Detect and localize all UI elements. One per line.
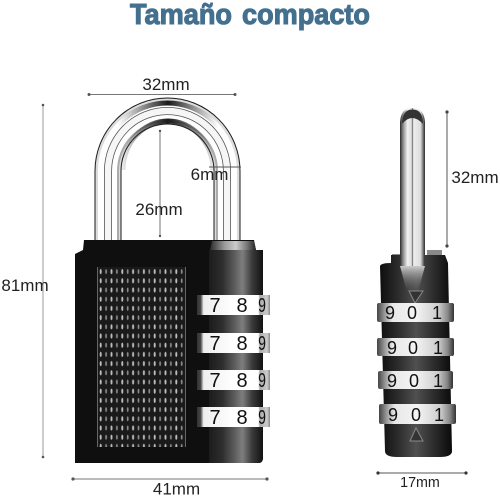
dimension: 32mm width <box>88 75 236 96</box>
lock body <box>75 240 263 463</box>
combination wheel 3 <box>197 368 270 392</box>
side shackle reflection <box>400 266 425 292</box>
side wheel 4: 0 <box>411 405 421 425</box>
dimension: 32mm side height: 32mm <box>451 168 499 187</box>
side wheel 1 <box>377 303 454 323</box>
combination wheel 2: 8 <box>236 333 248 355</box>
side body <box>380 255 452 457</box>
shackle collar <box>210 241 256 250</box>
dimension: 26mm inner height <box>135 130 183 237</box>
combination wheel 4: 8 <box>236 407 248 429</box>
combination wheel 3: 8 <box>236 370 248 392</box>
combination wheel 2: 7 <box>209 333 221 355</box>
side shackle <box>400 108 425 266</box>
side wheel 3: 1 <box>433 371 443 391</box>
side wheel 2: 1 <box>433 338 443 358</box>
textured panel <box>97 267 186 447</box>
side wheel 4: 9 <box>388 405 398 425</box>
side wheel 4 <box>379 404 456 425</box>
front padlock <box>75 103 270 463</box>
side wheel 2 <box>377 338 454 358</box>
combination wheel 4: 9 <box>258 405 266 429</box>
side centre arrow top <box>409 291 423 303</box>
side padlock <box>377 108 456 457</box>
dimension: 6mm shackle: 6mm <box>191 165 228 184</box>
side wheel 1: 0 <box>407 303 417 323</box>
dimension: 32mm width: 32mm <box>142 75 190 94</box>
shackle <box>101 103 234 244</box>
combination wheel 3: 7 <box>209 370 221 392</box>
side wheel 3: 9 <box>387 371 397 391</box>
side collar nubs <box>392 250 442 266</box>
dimension: 17mm depth <box>376 471 468 491</box>
title <box>130 0 370 31</box>
combination wheel 2 <box>197 331 270 355</box>
combination wheel 4: 7 <box>209 407 221 429</box>
dimension: 32mm side height <box>445 110 499 248</box>
dimension: 41mm width <box>71 477 269 497</box>
side wheel 3 <box>378 371 453 391</box>
side wheel 1: 9 <box>385 303 395 323</box>
combination wheel 1: 9 <box>258 293 266 317</box>
dimension: 26mm inner height: 26mm <box>135 200 183 219</box>
side shackle cap <box>402 110 423 124</box>
dimension: 17mm depth: 17mm <box>400 475 440 491</box>
cylinder <box>209 250 263 463</box>
combination wheel 3: 9 <box>258 368 266 392</box>
combination wheel 1 <box>197 293 270 317</box>
side wheel 3: 0 <box>409 371 419 391</box>
dimension: 81mm height: 81mm <box>1 276 49 295</box>
side wheel 1: 1 <box>432 303 442 323</box>
side centre arrow bottom <box>410 428 423 441</box>
side wheel 2: 9 <box>387 338 397 358</box>
combination wheel 1: 8 <box>236 295 248 317</box>
combination wheel 1: 7 <box>209 295 221 317</box>
side wheel 4: 1 <box>434 405 444 425</box>
side wheel 2: 0 <box>408 338 418 358</box>
combination wheel 4 <box>197 405 270 429</box>
combination wheel 2: 9 <box>258 331 266 355</box>
